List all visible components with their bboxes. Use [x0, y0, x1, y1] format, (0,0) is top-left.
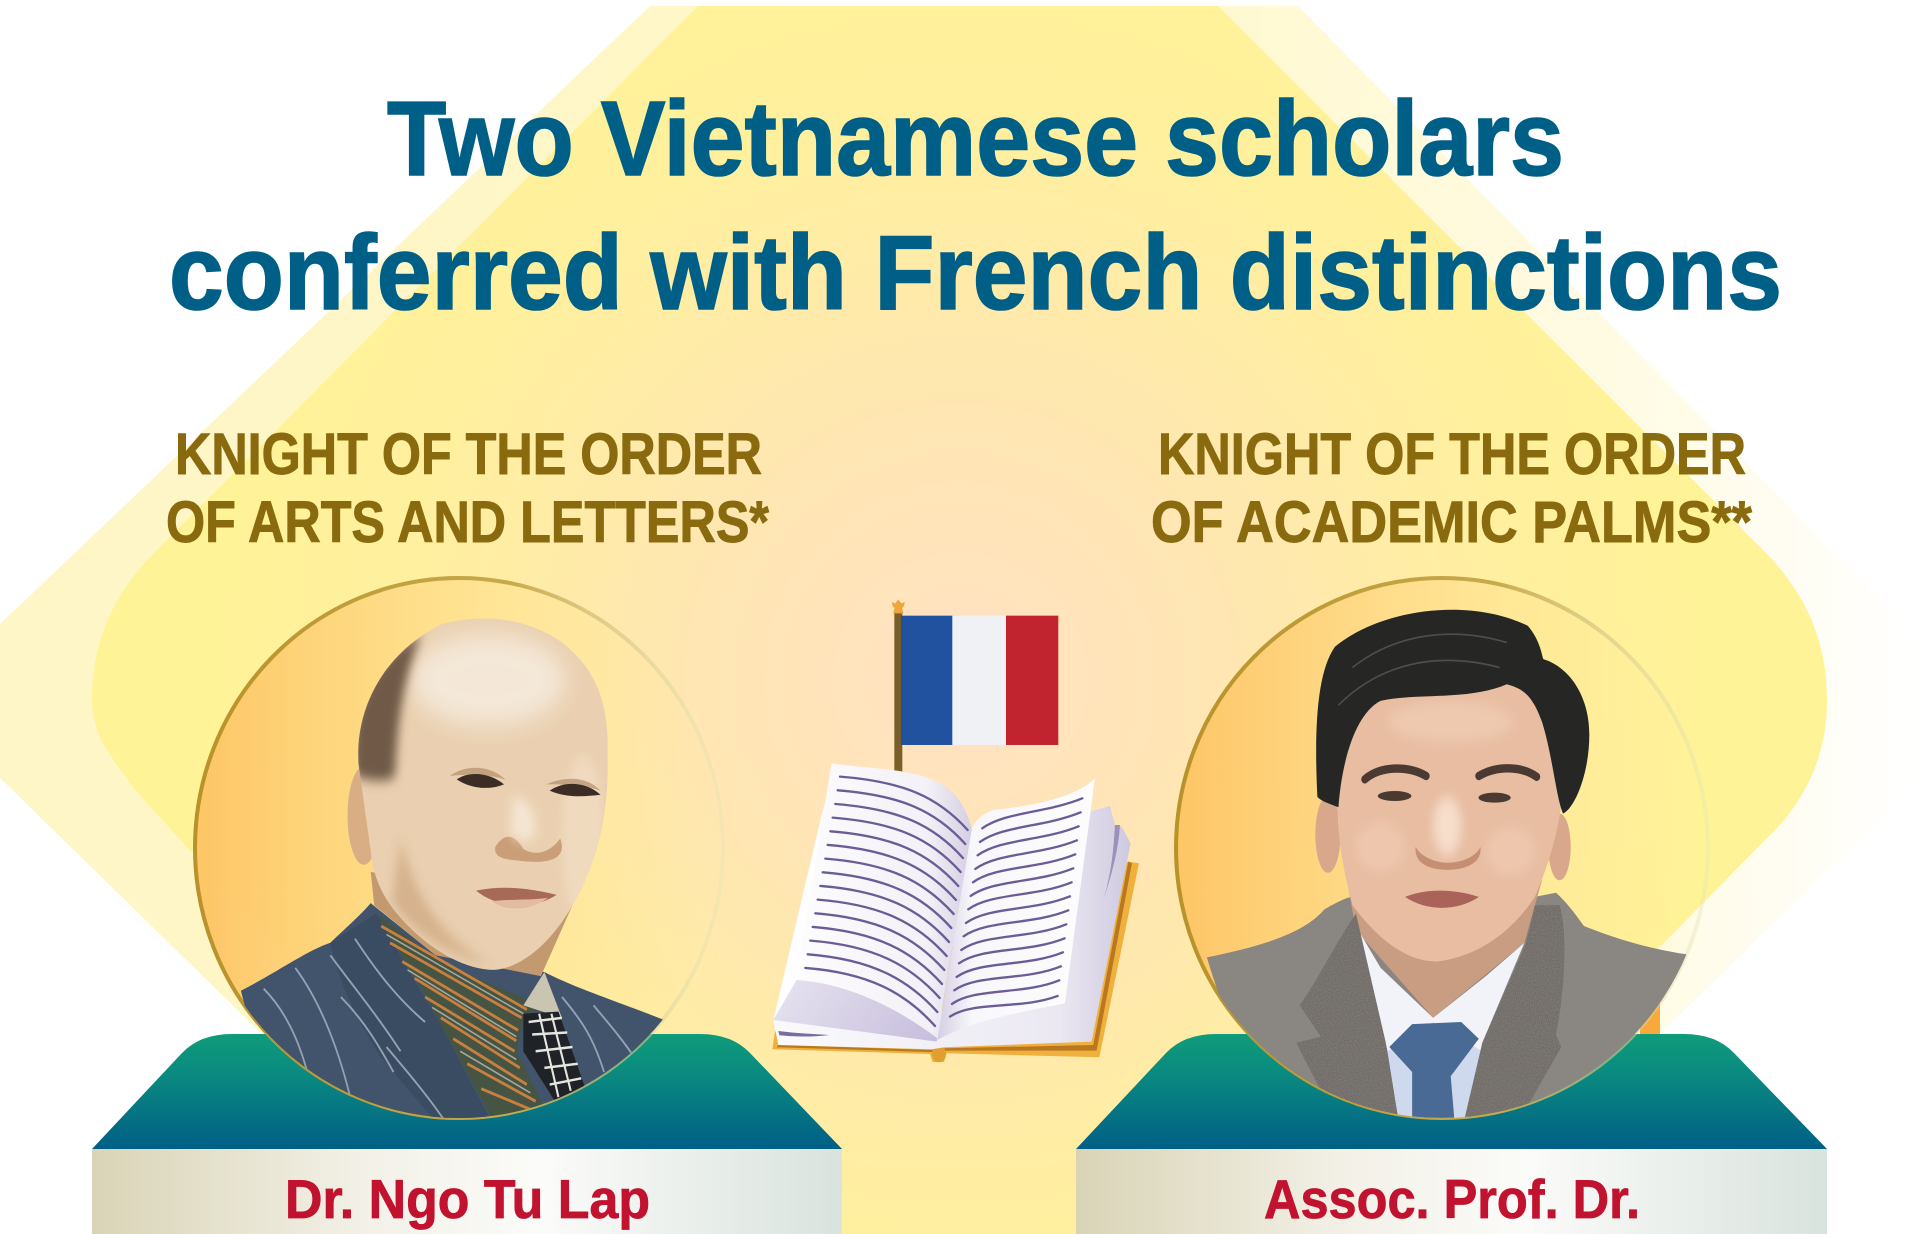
left page [796, 763, 972, 1038]
book cover [772, 862, 1139, 1062]
left under page [773, 815, 940, 1042]
title: Two Vietnamese scholars [387, 80, 1564, 198]
heading: left distinction [166, 422, 769, 555]
pedestal: left [92, 1034, 842, 1234]
heading: left distinction: OF ARTS AND LETTERS* [166, 490, 769, 555]
text lines: right [950, 798, 1082, 1017]
name: Dr. Ngo Tu Lap: Dr. Ngo Tu Lap [285, 1168, 650, 1230]
portrait: Assoc. Prof. Dr. [1176, 578, 1708, 1130]
pedestal: right [1076, 1000, 1827, 1234]
icon: French flag on pole [892, 599, 1058, 772]
heading: right distinction: OF ACADEMIC PALMS** [1151, 490, 1752, 555]
heading: right distinction [1151, 422, 1752, 555]
title [169, 80, 1782, 332]
portrait: Dr. Ngo Tu Lap [195, 578, 723, 1130]
title: conferred with French distinctions [169, 214, 1782, 332]
icon: open book [772, 763, 1139, 1062]
name: Assoc. Prof. Dr.: Assoc. Prof. Dr. [1264, 1168, 1640, 1230]
page block [773, 806, 1131, 1049]
heading: right distinction: KNIGHT OF THE ORDER [1158, 422, 1746, 487]
text lines: left [805, 777, 968, 1026]
heading: left distinction: KNIGHT OF THE ORDER [175, 422, 762, 487]
right page [937, 778, 1095, 1040]
